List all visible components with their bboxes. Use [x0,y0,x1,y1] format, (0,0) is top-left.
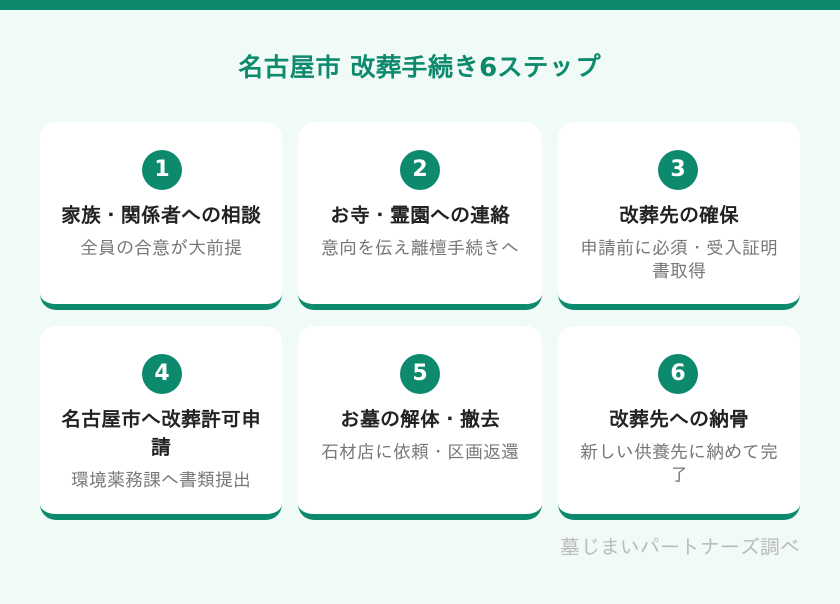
step 1 description: 全員の合意が大前提 [80,238,242,259]
step 6 description: 新しい供養先に納めて完了 [580,442,778,486]
step 2 number: 2 [412,157,428,182]
top bar [0,0,840,10]
step 2 heading: お寺・霊園への連絡 [330,203,510,227]
panel: step 4 [40,326,282,520]
step 5 heading: お墓の解体・撤去 [340,407,500,431]
source note: 墓じまいパートナーズ調べ [560,535,800,559]
panel: step 3 [558,122,800,310]
step 6 heading: 改葬先への納骨 [609,407,749,431]
title: 名古屋市 改葬手続き6ステップ [238,53,600,83]
step 3 heading: 改葬先の確保 [619,203,739,227]
step 3 number: 3 [670,157,686,182]
step 1 number: 1 [154,157,170,182]
step 3 description: 申請前に必須・受入証明書取得 [580,238,778,282]
step 2 number [400,150,440,190]
step 3 number [658,150,698,190]
step 6 number: 6 [670,361,686,386]
step 1 number [142,150,182,190]
step 1 heading: 家族・関係者への相談 [61,203,261,227]
step 2 description: 意向を伝え離檀手続きへ [321,238,519,259]
panel: step 2 [298,122,542,310]
step 5 number [400,354,440,394]
panel: step 1 [40,122,282,310]
panel: step 5 [298,326,542,520]
step 4 heading: 名古屋市へ改葬許可申請 [61,407,261,459]
step 5 description: 石材店に依頼・区画返還 [321,442,519,463]
step 4 number [142,354,182,394]
panel: step 6 [558,326,800,520]
step 4 description: 環境薬務課へ書類提出 [71,470,251,491]
step 6 number [658,354,698,394]
step 4 number: 4 [154,361,170,386]
step 5 number: 5 [412,361,428,386]
